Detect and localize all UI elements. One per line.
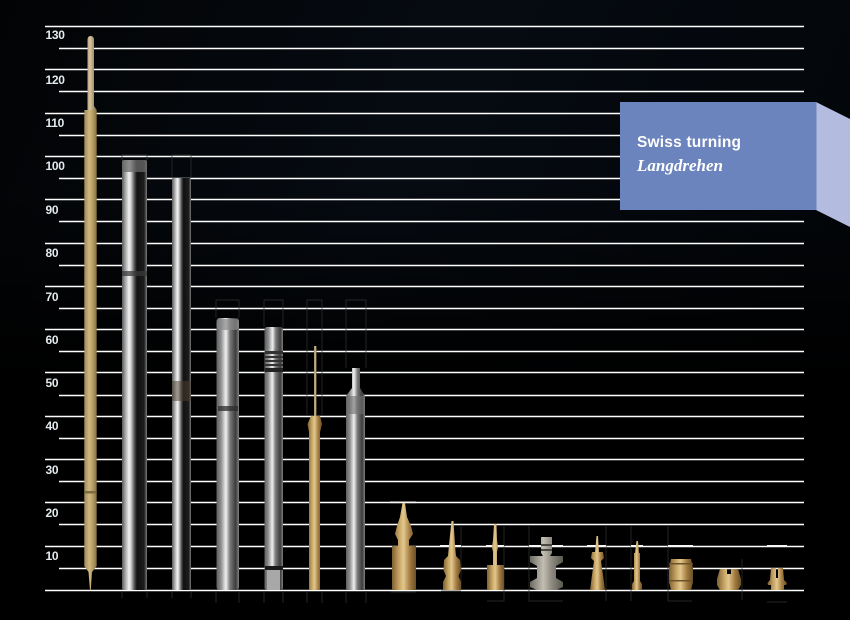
part 12: brass spire fitting <box>590 536 605 590</box>
part 14: brass barrel <box>669 559 693 590</box>
part 13: brass slim fitting <box>632 541 642 590</box>
part 4: steel shaft with head <box>216 318 239 590</box>
part 16: brass slotted tip <box>768 568 787 590</box>
part 6: brass needle <box>308 346 322 590</box>
axis labels: 80 <box>46 246 59 260</box>
axis labels: 70 <box>46 290 59 304</box>
axis labels <box>46 28 65 563</box>
axis labels: 120 <box>46 73 65 87</box>
axis labels: 40 <box>46 419 59 433</box>
callout subheading: Langdrehen <box>636 156 723 175</box>
part 8: brass stepped fitting <box>392 503 416 590</box>
frame ticks around parts <box>122 155 787 603</box>
part 1: long brass pin <box>84 36 97 590</box>
axis labels: 20 <box>46 506 59 520</box>
axis labels: 100 <box>46 159 65 173</box>
part 3: steel shaft <box>172 178 191 590</box>
axis labels: 60 <box>46 333 59 347</box>
part 2: steel shaft <box>122 160 147 590</box>
axis labels: 130 <box>46 28 65 42</box>
axis labels: 30 <box>46 463 59 477</box>
axis labels: 90 <box>46 203 59 217</box>
callout heading: Swiss turning <box>637 134 741 151</box>
part 7: stepped steel shaft <box>346 368 365 590</box>
axis labels: 110 <box>46 116 65 130</box>
axis labels: 10 <box>46 549 59 563</box>
callout side fold <box>816 102 850 227</box>
part 11: nickel flanged spool <box>530 537 563 590</box>
white tick highlights <box>390 502 787 547</box>
part 5: steel shaft with grooves <box>264 327 283 590</box>
part 10: brass pin fitting <box>487 524 504 590</box>
part 9: brass tapered fitting <box>443 521 461 590</box>
part 15: brass slotted nut <box>717 569 741 590</box>
axis labels: 50 <box>46 376 59 390</box>
callout panel <box>620 102 816 210</box>
callout: Swiss turning <box>620 102 850 227</box>
